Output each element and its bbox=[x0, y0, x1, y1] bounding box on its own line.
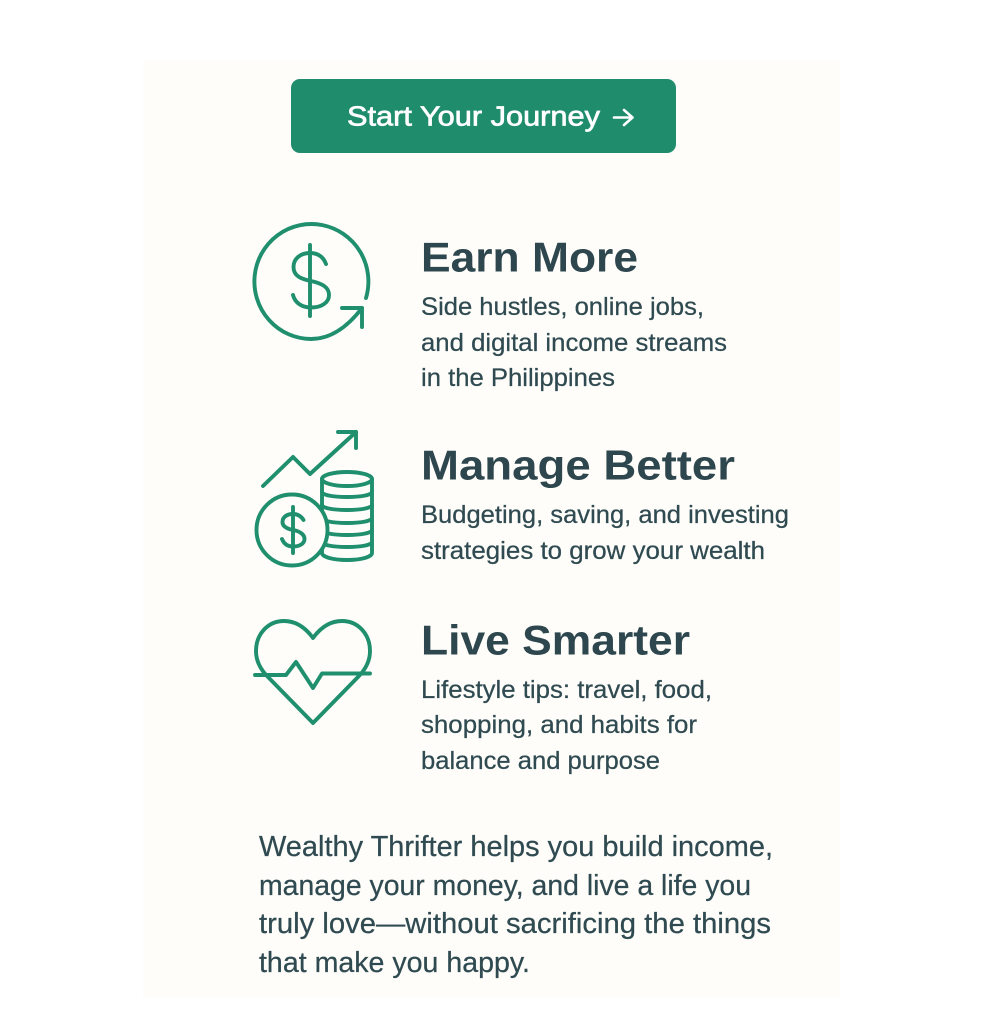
text: closing paragraph: Wealthy Thrifter helps you build income, bbox=[259, 831, 773, 863]
text: Earn More description bbox=[421, 293, 727, 392]
icon: heart with pulse line bbox=[255, 621, 370, 723]
panel: background card bbox=[143, 60, 840, 997]
button: Start Your Journey bbox=[291, 79, 676, 153]
text: Live Smarter description: Lifestyle tips: travel, food, bbox=[421, 676, 712, 704]
heading: Manage Better: Manage Better bbox=[421, 442, 735, 488]
heading: Live Smarter: Live Smarter bbox=[421, 616, 690, 664]
text: Manage Better description: Budgeting, saving, and investing bbox=[421, 501, 789, 529]
text: Earn More description: in the Philippines bbox=[421, 364, 615, 392]
button: Start Your Journey: Start Your Journey bbox=[347, 100, 600, 132]
text: closing paragraph: truly love—without sacrificing the things bbox=[259, 908, 771, 940]
text: Live Smarter description: balance and purpose bbox=[421, 747, 660, 775]
text: Earn More description: and digital income streams bbox=[421, 329, 727, 357]
icon: growth arrow with coins bbox=[256, 432, 372, 566]
text: Earn More description: Side hustles, online jobs, bbox=[421, 293, 704, 321]
text: Manage Better description: strategies to grow your wealth bbox=[421, 537, 765, 565]
section: Manage Better bbox=[256, 432, 789, 566]
section: Earn More bbox=[254, 224, 727, 392]
text: closing paragraph: that make you happy. bbox=[259, 947, 530, 979]
text: closing paragraph: manage your money, and live a life you bbox=[259, 870, 751, 902]
text: closing paragraph bbox=[259, 831, 773, 979]
heading: Earn More: Earn More bbox=[421, 234, 638, 280]
text: Manage Better description bbox=[421, 501, 789, 565]
text: Live Smarter description bbox=[421, 676, 712, 775]
section: Live Smarter bbox=[255, 616, 712, 775]
icon: dollar in circular arrow bbox=[254, 224, 368, 339]
text: Live Smarter description: shopping, and habits for bbox=[421, 711, 697, 739]
